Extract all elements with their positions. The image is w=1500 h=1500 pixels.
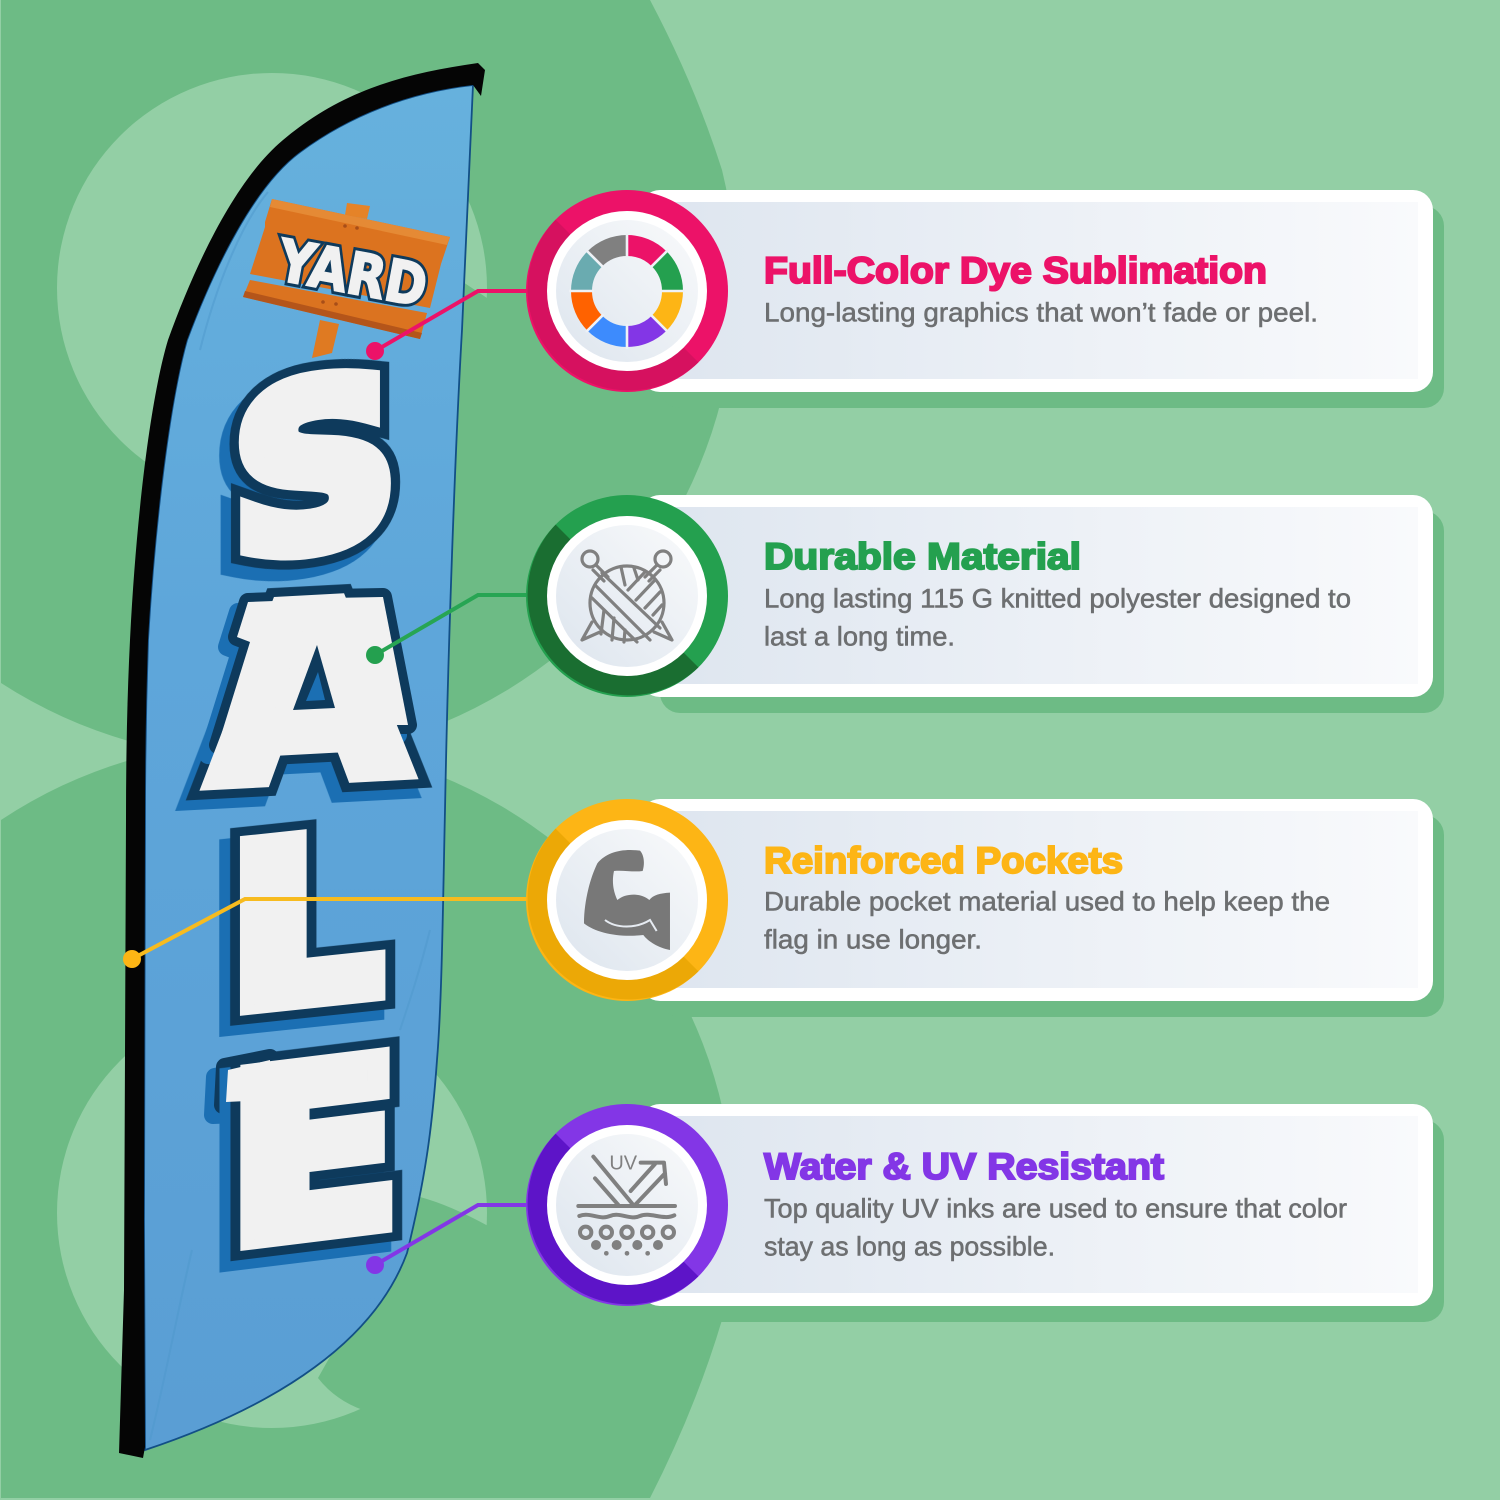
heading 1: Full-Color Dye Sublimation <box>764 250 1267 291</box>
icon ring 3 <box>526 799 728 1001</box>
flag fabric <box>144 85 473 1450</box>
card 2 <box>640 495 1433 697</box>
letter L: L <box>229 789 381 1059</box>
card 3 <box>640 799 1433 1001</box>
feature 3: reinforced pockets <box>123 799 1433 1001</box>
icon: color wheel <box>569 233 685 349</box>
connector line 1 <box>366 291 527 360</box>
description 4: stay as long as possible. <box>764 1232 1055 1262</box>
yard sign <box>243 199 450 358</box>
letter S: S <box>233 326 397 611</box>
letter E: E <box>228 1010 400 1297</box>
fabric folds <box>150 192 430 1440</box>
icon ring 1 <box>526 190 728 392</box>
description 2: Long lasting 115 G knitted polyester designed to <box>764 584 1351 614</box>
description 4: Top quality UV inks are used to ensure that color <box>764 1194 1347 1224</box>
feature 4: water and uv resistant <box>366 1104 1433 1306</box>
yard sign: YARD <box>272 226 433 320</box>
heading 4: Water & UV Resistant <box>764 1146 1164 1187</box>
icon: yarn ball and needles <box>582 551 672 642</box>
heading 2: Durable Material <box>764 536 1081 577</box>
description 1: Long-lasting graphics that won’t fade or peel. <box>764 298 1318 328</box>
letter L: L <box>229 789 381 1059</box>
letter E: E <box>228 1010 400 1297</box>
letter A: A <box>213 554 405 835</box>
card shadows <box>660 206 1444 1322</box>
sign word: YARD <box>272 226 433 320</box>
icon ring 4 <box>526 1104 728 1306</box>
description 3: flag in use longer. <box>764 924 982 954</box>
flag pole sleeve <box>119 63 485 1458</box>
description 4 <box>764 1194 1347 1262</box>
card 1 <box>640 190 1433 392</box>
card 4 <box>640 1104 1433 1306</box>
connector line 2 <box>366 595 527 664</box>
heading 3: Reinforced Pockets <box>764 840 1123 881</box>
connector line 4 <box>366 1205 527 1274</box>
description 2: last a long time. <box>764 622 955 652</box>
feature 2: durable material <box>366 495 1433 697</box>
feature 1: full-color dye sublimation <box>366 190 1433 392</box>
description 3 <box>764 886 1330 954</box>
icon: uv protection layers: UV <box>609 1152 638 1174</box>
connector line 3 <box>123 899 527 968</box>
icon ring 2 <box>526 495 728 697</box>
icon: uv protection layers <box>578 1152 675 1256</box>
description 3: Durable pocket material used to help keep the <box>764 886 1330 916</box>
letter A: A <box>213 554 405 835</box>
flag <box>119 63 485 1458</box>
description 2 <box>764 584 1351 652</box>
letter S: S <box>233 326 397 611</box>
icon: flexed arm <box>584 850 670 950</box>
